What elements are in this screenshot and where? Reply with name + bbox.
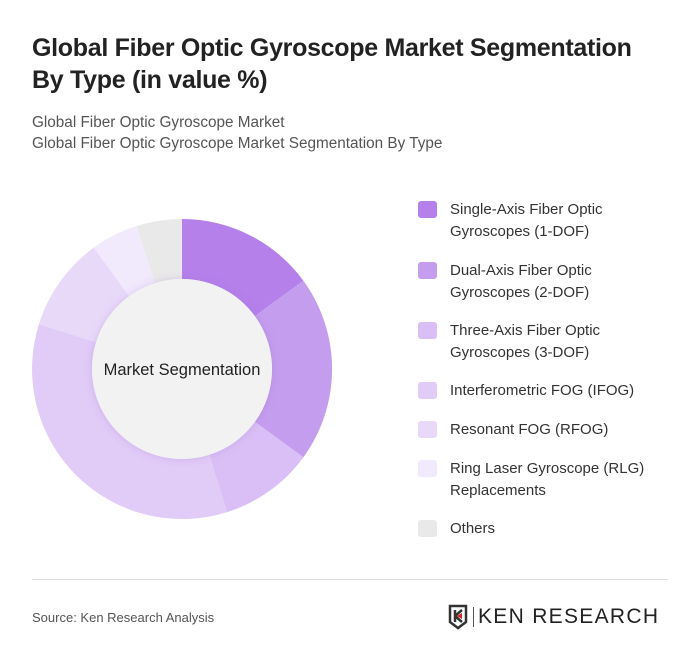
legend: IFOG: Interferometric FOG (IFOG) — [450, 382, 634, 399]
legend: dual-axis: Dual-Axis Fiber Optic Gyroscopes (2-DOF) — [450, 262, 592, 301]
legend: single-axis: Single-Axis Fiber Optic Gyroscopes (1-DOF) — [450, 201, 603, 240]
logo: KEN RESEARCH — [478, 605, 659, 628]
legend: others: Others — [450, 520, 495, 537]
legend: others — [418, 520, 495, 537]
legend: three-axis: Three-Axis Fiber Optic Gyroscopes (3-DOF) — [450, 322, 600, 361]
donut chart: Market Segmentation — [104, 361, 260, 379]
title: Global Fiber Optic Gyroscope Market Segmentation By Type (in value %) — [32, 34, 632, 94]
legend: RFOG: Resonant FOG (RFOG) — [450, 421, 608, 438]
subtitle: Global Fiber Optic Gyroscope Market Segmentation By Type — [32, 135, 442, 152]
source: Source: Ken Research Analysis — [32, 610, 214, 625]
subtitle: Global Fiber Optic Gyroscope Market — [32, 114, 284, 131]
subtitle — [32, 114, 442, 152]
legend: RLG: Ring Laser Gyroscope (RLG) Replacements — [450, 460, 644, 499]
